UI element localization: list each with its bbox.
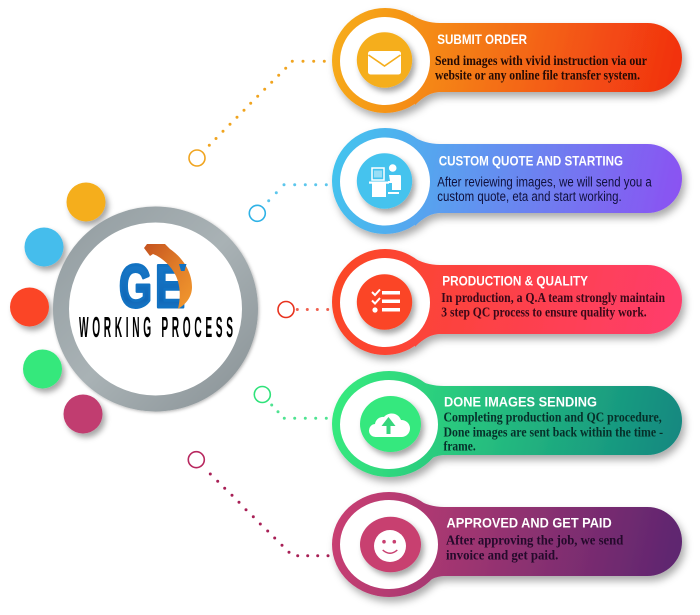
body text: In production, a Q.A team strongly maintain bbox=[441, 290, 666, 305]
body text bbox=[435, 53, 647, 82]
body text: frame. bbox=[444, 439, 476, 454]
body text: After reviewing images, we will send you a bbox=[437, 175, 652, 190]
connector: submit order bbox=[189, 60, 326, 166]
heading: DONE IMAGES SENDING bbox=[444, 393, 597, 409]
logo E corner bbox=[179, 264, 186, 271]
heading: PRODUCTION & QUALITY bbox=[442, 272, 589, 288]
connector: custom quote bbox=[249, 183, 328, 221]
heading: APPROVED AND GET PAID bbox=[446, 515, 612, 531]
panel: custom quote bbox=[332, 128, 682, 234]
body text bbox=[444, 409, 663, 454]
connector: done images bbox=[254, 386, 328, 420]
icon: checklist bbox=[372, 290, 400, 313]
body text: 3 step QC process to ensure quality work. bbox=[441, 305, 647, 320]
connector: approved bbox=[188, 452, 330, 557]
body text: website or any online file transfer system. bbox=[435, 68, 640, 82]
body text: Done images are sent back within the time - bbox=[444, 424, 663, 439]
icon: envelope bbox=[368, 51, 401, 74]
body text: Completing production and QC procedure, bbox=[444, 409, 662, 424]
body text bbox=[446, 533, 624, 562]
central ring with logo bbox=[61, 214, 250, 404]
panel: production and quality bbox=[332, 249, 682, 355]
logo caption: WORKING PROCESS bbox=[79, 310, 233, 344]
icon: person at desk bbox=[369, 164, 401, 197]
logo letters: G bbox=[119, 253, 152, 320]
panel: submit order bbox=[332, 8, 682, 113]
body text: invoice and get paid. bbox=[446, 547, 558, 562]
body text: Send images with vivid instruction via our bbox=[435, 53, 647, 68]
icon: smiley bbox=[374, 530, 406, 562]
body text: After approving the job, we send bbox=[446, 533, 624, 548]
heading: CUSTOM QUOTE AND STARTING bbox=[439, 153, 623, 169]
logo arrow bbox=[144, 244, 192, 309]
panel: approved and get paid bbox=[332, 492, 682, 597]
body text bbox=[441, 290, 666, 320]
heading: SUBMIT ORDER bbox=[437, 31, 527, 47]
icon: cloud upload bbox=[369, 413, 410, 437]
connector: production bbox=[278, 302, 329, 318]
panel: done images sending bbox=[332, 371, 682, 477]
body text bbox=[437, 175, 652, 204]
body text: custom quote, eta and start working. bbox=[437, 189, 622, 204]
logo letters: E bbox=[155, 253, 185, 320]
coloured dots bbox=[10, 182, 106, 434]
